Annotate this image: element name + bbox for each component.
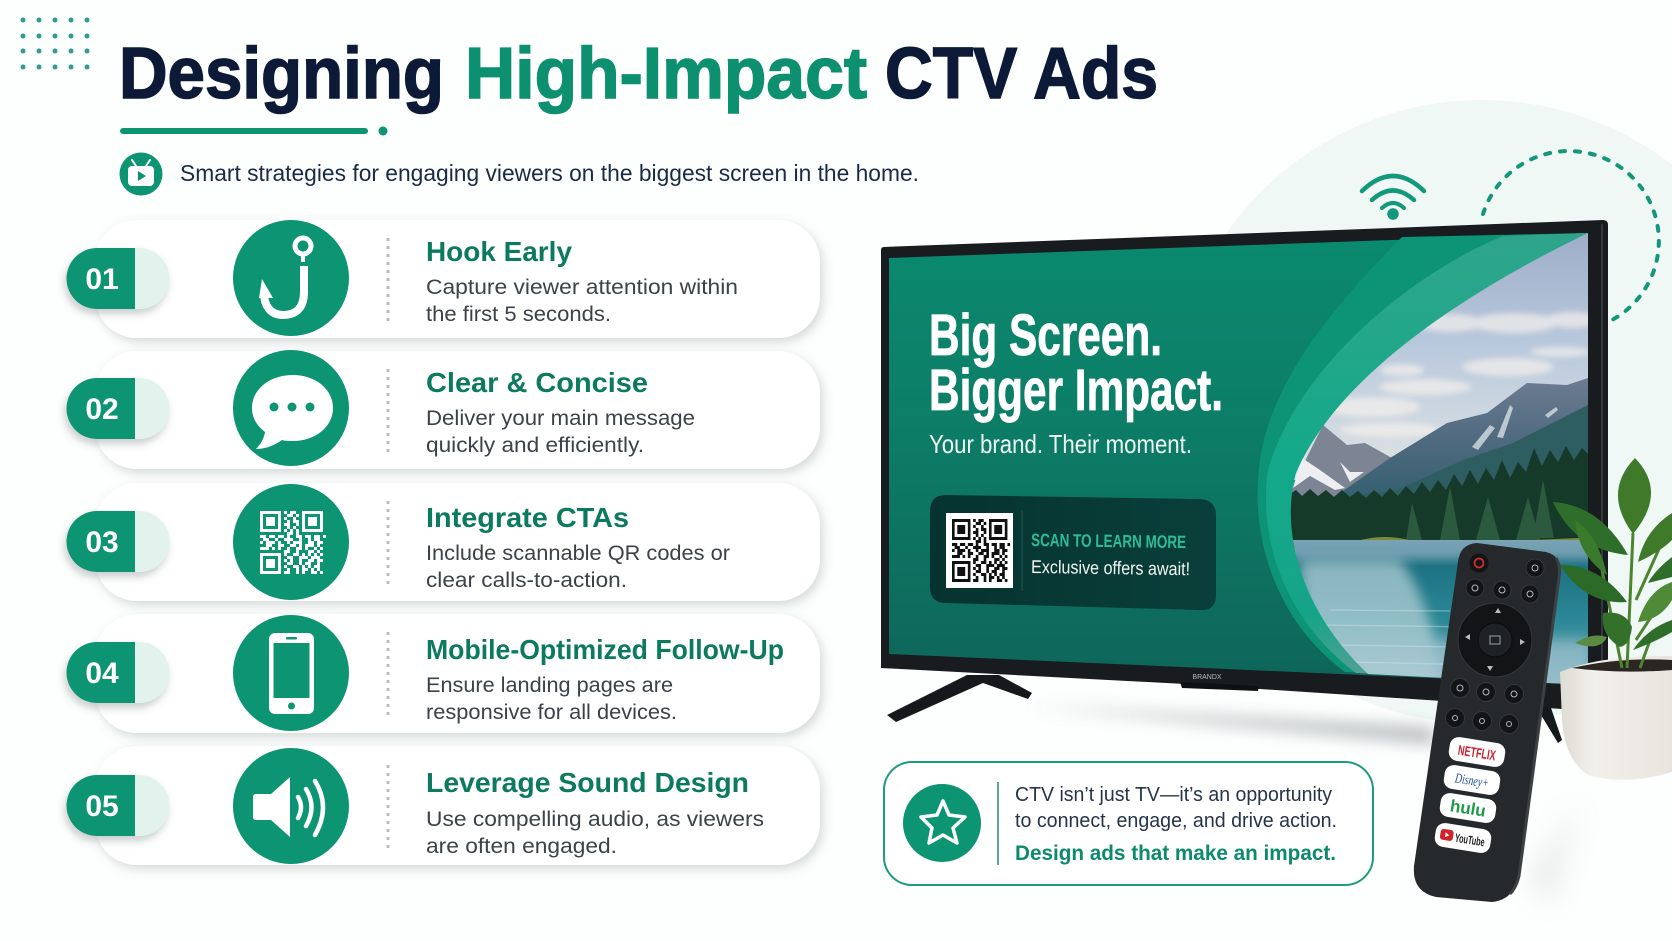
- remote body: [1414, 543, 1560, 902]
- swoosh light band: [1266, 233, 1588, 685]
- screen: [889, 233, 1588, 685]
- heading and description: Leverage Sound Design: [426, 767, 749, 798]
- power button: [1470, 554, 1488, 572]
- icon: chat bubble: [233, 350, 349, 466]
- television: BRANDX: [1192, 674, 1222, 681]
- callout text: Design ads that make an impact.: [1015, 842, 1336, 865]
- heading and description: [426, 767, 764, 858]
- bezel: [881, 220, 1608, 712]
- number badge 03: 03: [85, 526, 119, 559]
- title: CTV Ads: [885, 34, 1158, 114]
- d-pad: [1458, 603, 1532, 677]
- card 3: [95, 483, 820, 601]
- card 2: [95, 351, 820, 469]
- heading and description: Ensure landing pages are: [426, 674, 673, 697]
- title: High-Impact: [465, 34, 867, 114]
- hulu button: hulu: [1449, 796, 1487, 821]
- swoosh dark band: [1258, 233, 1588, 685]
- qr code: [946, 513, 1013, 588]
- card 5: [95, 746, 820, 865]
- number badge 04: 04: [85, 657, 119, 690]
- upright leaf: [1618, 458, 1651, 534]
- floor shadows: [1025, 706, 1440, 744]
- row 2: clear and concise: [66, 350, 820, 469]
- forest: [1288, 446, 1590, 548]
- disney button: Disney+: [1453, 771, 1490, 792]
- hulu button: [1438, 792, 1498, 824]
- icon: wifi: [1362, 176, 1424, 218]
- youtube button: [1433, 822, 1493, 854]
- shoreline grass: [1361, 537, 1580, 540]
- row 4: mobile follow-up: [66, 614, 820, 733]
- plant pot: [1560, 656, 1672, 780]
- heading and description: Deliver your main message: [426, 407, 695, 430]
- heading and description: [426, 634, 784, 724]
- card 4: [95, 614, 820, 733]
- heading and description: [426, 367, 695, 457]
- icon: QR code: [233, 484, 349, 600]
- number badge 05: [66, 775, 170, 836]
- icon: star: [903, 784, 981, 862]
- heading and description: responsive for all devices.: [426, 701, 677, 724]
- number badge 04: [66, 642, 170, 703]
- divider: [386, 632, 390, 715]
- divider: [386, 765, 390, 848]
- heading and description: quickly and efficiently.: [426, 434, 644, 457]
- tv stand: [887, 675, 1562, 743]
- green lower slope: [1349, 405, 1588, 498]
- icon: speaker: [233, 748, 349, 864]
- scan text: SCAN TO LEARN MORE: [1031, 530, 1186, 552]
- heading and description: Use compelling audio, as viewers: [426, 808, 764, 831]
- title underline: [120, 126, 388, 136]
- tv headline: [929, 303, 1223, 423]
- row 3: integrate CTAs: [66, 483, 820, 601]
- heading and description: Mobile-Optimized Follow-Up: [426, 634, 784, 665]
- tv tagline: Your brand. Their moment.: [929, 429, 1192, 459]
- heading and description: Clear & Concise: [426, 367, 648, 398]
- row 1: hook early: [66, 220, 820, 338]
- number badge 01: [66, 248, 170, 309]
- heading and description: Integrate CTAs: [426, 502, 629, 533]
- icon: smartphone: [233, 615, 349, 731]
- subtitle icon: tv: [120, 152, 162, 196]
- youtube button: YouTube: [1454, 831, 1486, 849]
- heading and description: Hook Early: [426, 236, 572, 267]
- number badge 02: 02: [85, 393, 119, 426]
- remote control: [1414, 543, 1560, 902]
- dashed arc decoration: [1483, 151, 1659, 320]
- top buttons: [1466, 559, 1544, 603]
- tv headline: Bigger Impact.: [929, 358, 1223, 423]
- callout text: [1015, 784, 1337, 865]
- callout: [884, 762, 1373, 885]
- heading and description: are often engaged.: [426, 835, 617, 858]
- callout text: CTV isn’t just TV—it’s an opportunity: [1015, 784, 1332, 806]
- divider: [386, 501, 390, 584]
- subtitle: Smart strategies for engaging viewers on the biggest screen in the home.: [180, 160, 919, 186]
- number badge 01: 01: [85, 263, 119, 296]
- heading and description: the first 5 seconds.: [426, 303, 611, 326]
- divider: [386, 238, 390, 321]
- disney button: [1442, 764, 1502, 796]
- plant leaves: [1553, 458, 1672, 668]
- dot grid decoration: [20, 18, 90, 70]
- lake: [1280, 540, 1590, 686]
- heading and description: clear calls-to-action.: [426, 569, 627, 592]
- title: Designing: [119, 34, 444, 114]
- number badge 05: 05: [85, 790, 119, 823]
- qr panel: [930, 495, 1216, 610]
- tv headline: Big Screen.: [929, 303, 1162, 368]
- offer text: Exclusive offers await!: [1031, 556, 1190, 579]
- landscape photo: [1280, 230, 1600, 690]
- callout text: to connect, engage, and drive action.: [1015, 810, 1337, 832]
- icon: fish hook: [233, 220, 349, 336]
- heading and description: [426, 236, 738, 326]
- heading and description: [426, 502, 730, 592]
- number badge 02: [66, 378, 170, 439]
- heading and description: Capture viewer attention within: [426, 276, 738, 299]
- row 5: sound design: [66, 746, 820, 865]
- netflix button: NETFLIX: [1457, 742, 1497, 763]
- remote shadow: [1530, 800, 1580, 905]
- decorative background circle: [1170, 100, 1672, 724]
- divider: [386, 369, 390, 452]
- heading and description: Include scannable QR codes or: [426, 542, 730, 565]
- netflix button: [1447, 736, 1507, 768]
- title: [119, 34, 1158, 114]
- left peak: [1288, 425, 1392, 500]
- lower buttons: [1446, 678, 1524, 734]
- center tab and brand: [1180, 682, 1259, 691]
- television: [881, 220, 1608, 712]
- card 1: [95, 220, 820, 338]
- callout box: [884, 762, 1373, 885]
- number badge 03: [66, 511, 170, 572]
- main ridge: [1333, 378, 1588, 500]
